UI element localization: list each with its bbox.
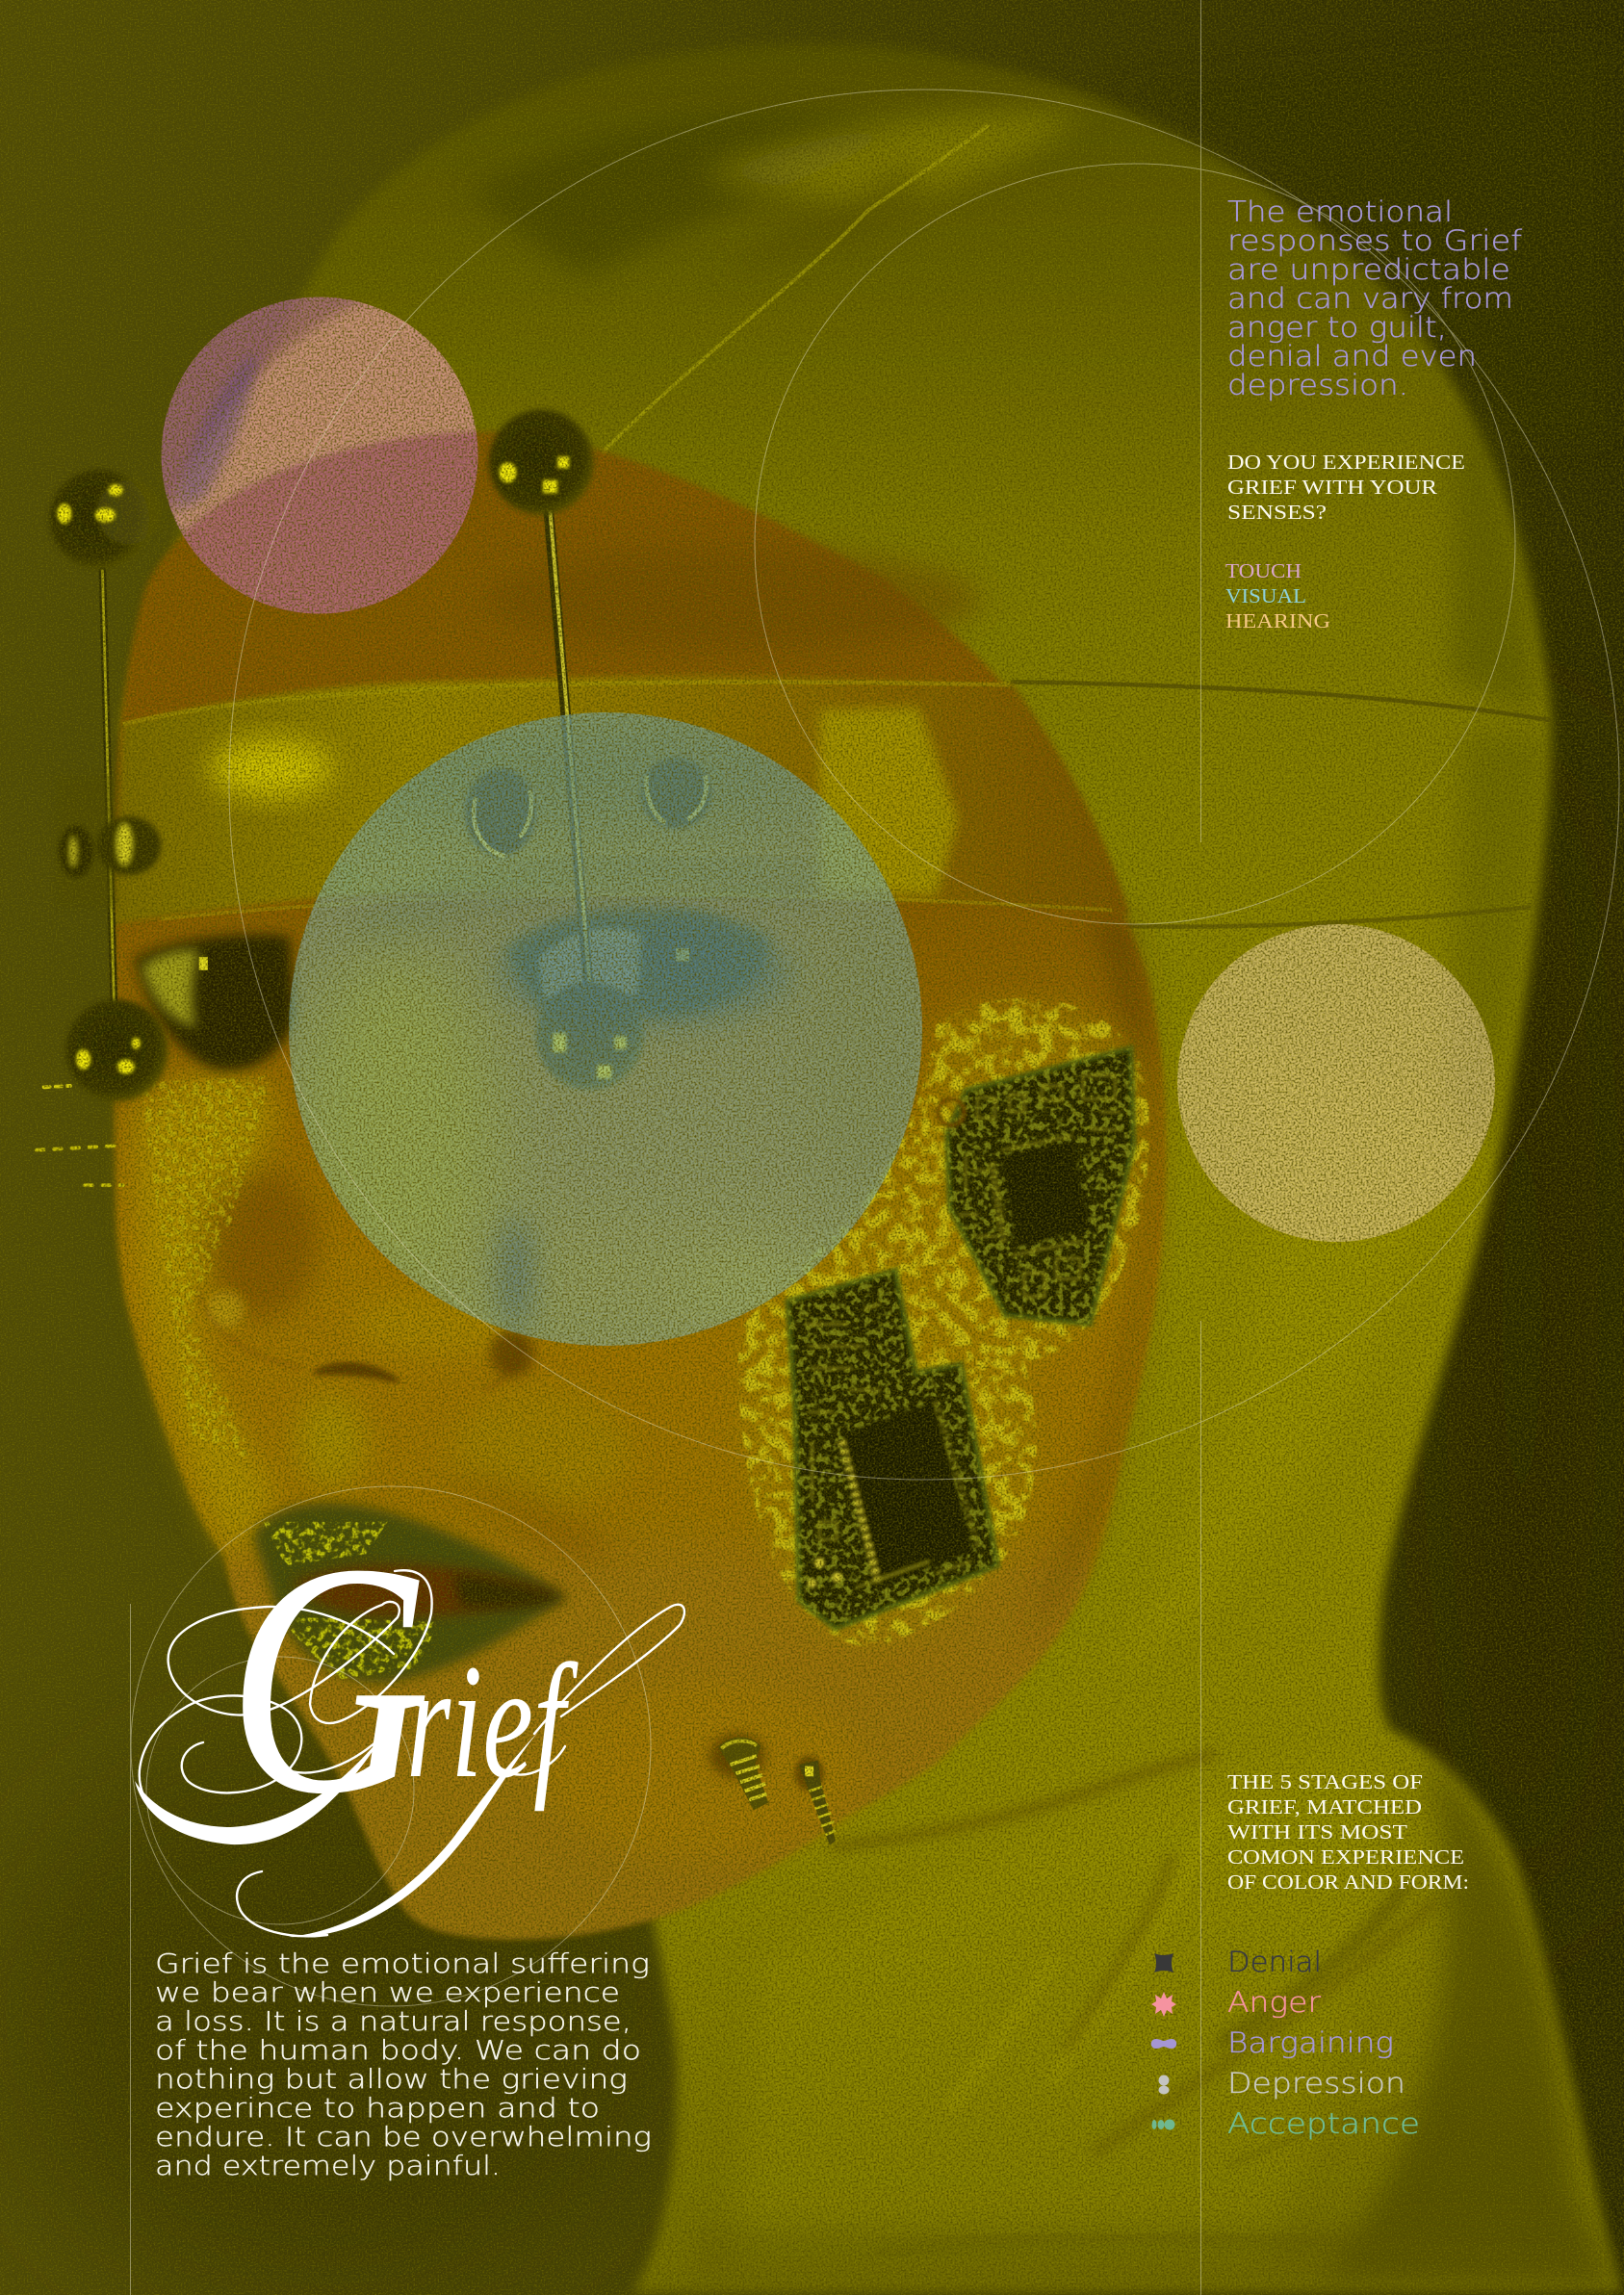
intro paragraph: and extremely painful. — [155, 2150, 501, 2181]
title flourishes — [140, 1570, 684, 1936]
circle: blue visual — [289, 712, 922, 1346]
icon: acceptance — [1151, 2120, 1174, 2129]
stages heading: OF COLOR AND FORM: — [1227, 1870, 1469, 1894]
senses question: GRIEF WITH YOUR — [1227, 476, 1437, 499]
top right statement: The emotional — [1227, 195, 1453, 228]
hood bright patch under pink circle — [164, 300, 498, 534]
blue circle tonal patches — [293, 717, 922, 1346]
label: acceptance: Acceptance — [1227, 2107, 1420, 2140]
label: denial: Denial — [1227, 1946, 1322, 1978]
top right statement: anger to guilt, — [1227, 311, 1447, 344]
senses question: SENSES? — [1227, 501, 1327, 524]
stages legend — [1151, 1946, 1420, 2140]
intro paragraph: Grief is the emotional suffering — [155, 1947, 650, 1979]
top right statement: are unpredictable — [1227, 253, 1510, 286]
top right statement: and can vary from — [1227, 282, 1513, 315]
top right statement — [1227, 195, 1523, 401]
icon: anger — [1151, 1992, 1176, 2017]
senses list — [1225, 559, 1330, 632]
background shadows — [0, 1748, 644, 2290]
face shading — [132, 547, 1153, 1858]
stages heading: GRIEF, MATCHED — [1227, 1795, 1422, 1818]
stages heading: COMON EXPERIENCE — [1227, 1845, 1464, 1869]
title: Grief script: G — [227, 1496, 431, 1863]
circuit chips — [738, 998, 1149, 1646]
stages heading: THE 5 STAGES OF — [1227, 1770, 1423, 1793]
intro paragraph: of the human body. We can do — [155, 2034, 641, 2066]
clamp — [56, 776, 161, 907]
circle: pink touch — [162, 297, 477, 614]
lips — [253, 1503, 568, 1683]
label: anger: Anger — [1227, 1986, 1321, 2019]
senses list: VISUAL — [1225, 584, 1306, 607]
top right statement: responses to Grief — [1227, 224, 1523, 257]
visor reflections — [366, 758, 819, 937]
pins — [37, 512, 590, 1185]
eye right — [504, 908, 769, 1017]
title: Grief script — [135, 1496, 684, 1937]
title: Grief script: rief — [406, 1631, 579, 1812]
top right statement: denial and even — [1227, 340, 1477, 373]
top right statement: depression. — [1227, 369, 1408, 401]
cheek speckle — [139, 1075, 271, 1463]
icon: depression — [1159, 2076, 1169, 2095]
intro paragraph: experince to happen and to — [155, 2092, 600, 2124]
intro paragraph: nothing but allow the grieving — [155, 2063, 628, 2095]
senses question: DO YOU EXPERIENCE — [1227, 451, 1465, 474]
visor band — [113, 675, 1129, 925]
screws — [709, 1734, 836, 1845]
stages heading: WITH ITS MOST — [1227, 1820, 1407, 1844]
intro paragraph: a loss. It is a natural response, — [155, 2005, 632, 2037]
eye left — [135, 935, 296, 1070]
senses list: HEARING — [1225, 609, 1330, 632]
intro paragraph: we bear when we experience — [155, 1976, 620, 2008]
face — [114, 431, 1166, 1940]
senses list: TOUCH — [1225, 559, 1302, 582]
intro paragraph — [155, 1947, 652, 2181]
circle: tan hearing — [1177, 924, 1495, 1242]
intro paragraph: endure. It can be overwhelming — [155, 2121, 652, 2153]
pink circle fold shading — [175, 351, 256, 512]
senses question — [1227, 451, 1465, 524]
nose details — [197, 1288, 534, 1390]
label: depression: Depression — [1227, 2067, 1405, 2100]
balls — [50, 410, 644, 1102]
label: bargaining: Bargaining — [1227, 2026, 1394, 2059]
hood folds — [468, 44, 1610, 2282]
icon: denial — [1154, 1953, 1173, 1973]
icon: bargaining — [1151, 2039, 1176, 2049]
stages heading — [1227, 1770, 1469, 1894]
